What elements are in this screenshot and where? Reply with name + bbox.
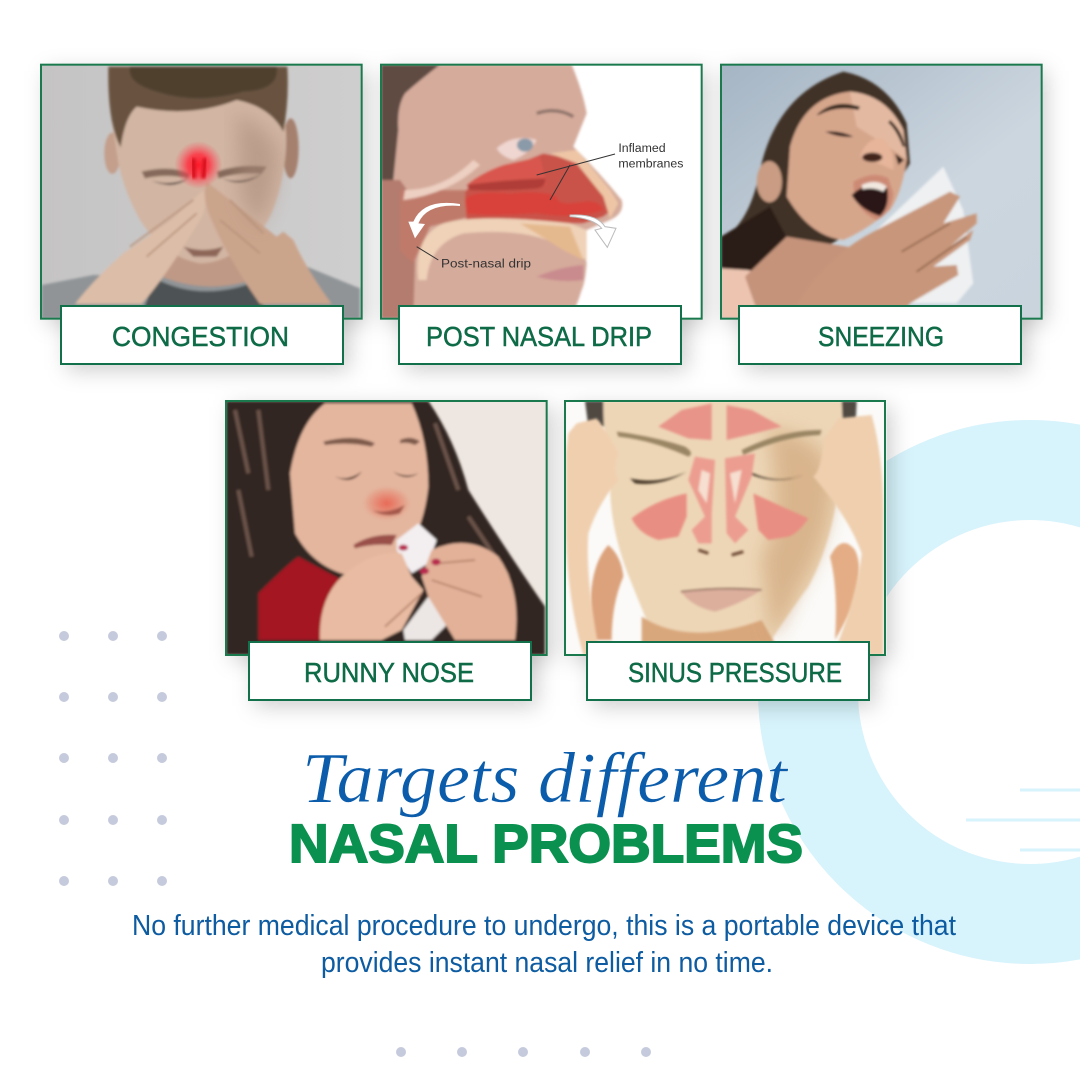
decorative dot grid left [59,631,167,886]
background ring [808,470,1080,914]
photo frame [565,401,885,655]
label: congestion [61,306,343,364]
callout: post-nasal drip: Post-nasal drip [441,257,531,271]
body text: provides instant nasal relief in no time. [321,947,773,979]
body text: No further medical procedure to undergo, this is a portable device that [132,910,956,942]
label: sinus pressure [587,642,869,700]
photo: man pinching nose bridge [41,65,362,319]
label: post nasal drip: POST NASAL DRIP [426,321,652,352]
photo frame [721,65,1042,319]
panel: sinus pressure [565,401,887,655]
decorative dot row bottom [396,1047,651,1057]
label: sinus pressure: SINUS PRESSURE [628,657,842,688]
label: sneezing [739,306,1021,364]
panel: sneezing [721,65,1042,319]
label: runny nose: RUNNY NOSE [304,657,474,688]
heading: nasal problems: NASAL PROBLEMS [289,814,803,874]
arrow: drip right [570,215,616,247]
photo frame [41,65,362,319]
panel shadows [47,71,1046,706]
panel: runny nose [226,401,547,655]
illustration: nasal cross-section [381,65,702,319]
heading: targets different: Targets different [302,738,789,818]
callout: inflamed membranes: membranes [618,156,683,170]
photo: woman sneezing into tissue [721,65,1042,319]
callout lines [417,154,615,260]
panel: post nasal drip [381,65,702,319]
label: sneezing: SNEEZING [818,321,944,352]
label: congestion: CONGESTION [112,321,289,352]
panel: congestion [41,65,362,319]
photo frame [226,401,547,655]
photo: woman blowing nose [226,401,547,655]
body text [132,910,956,979]
label: runny nose [249,642,531,700]
arrow: drip left [408,203,460,238]
callout: inflamed membranes: Inflamed [618,141,666,155]
photo: face with sinus overlay [566,401,887,655]
illustration frame [381,65,702,319]
label: post nasal drip [399,306,681,364]
